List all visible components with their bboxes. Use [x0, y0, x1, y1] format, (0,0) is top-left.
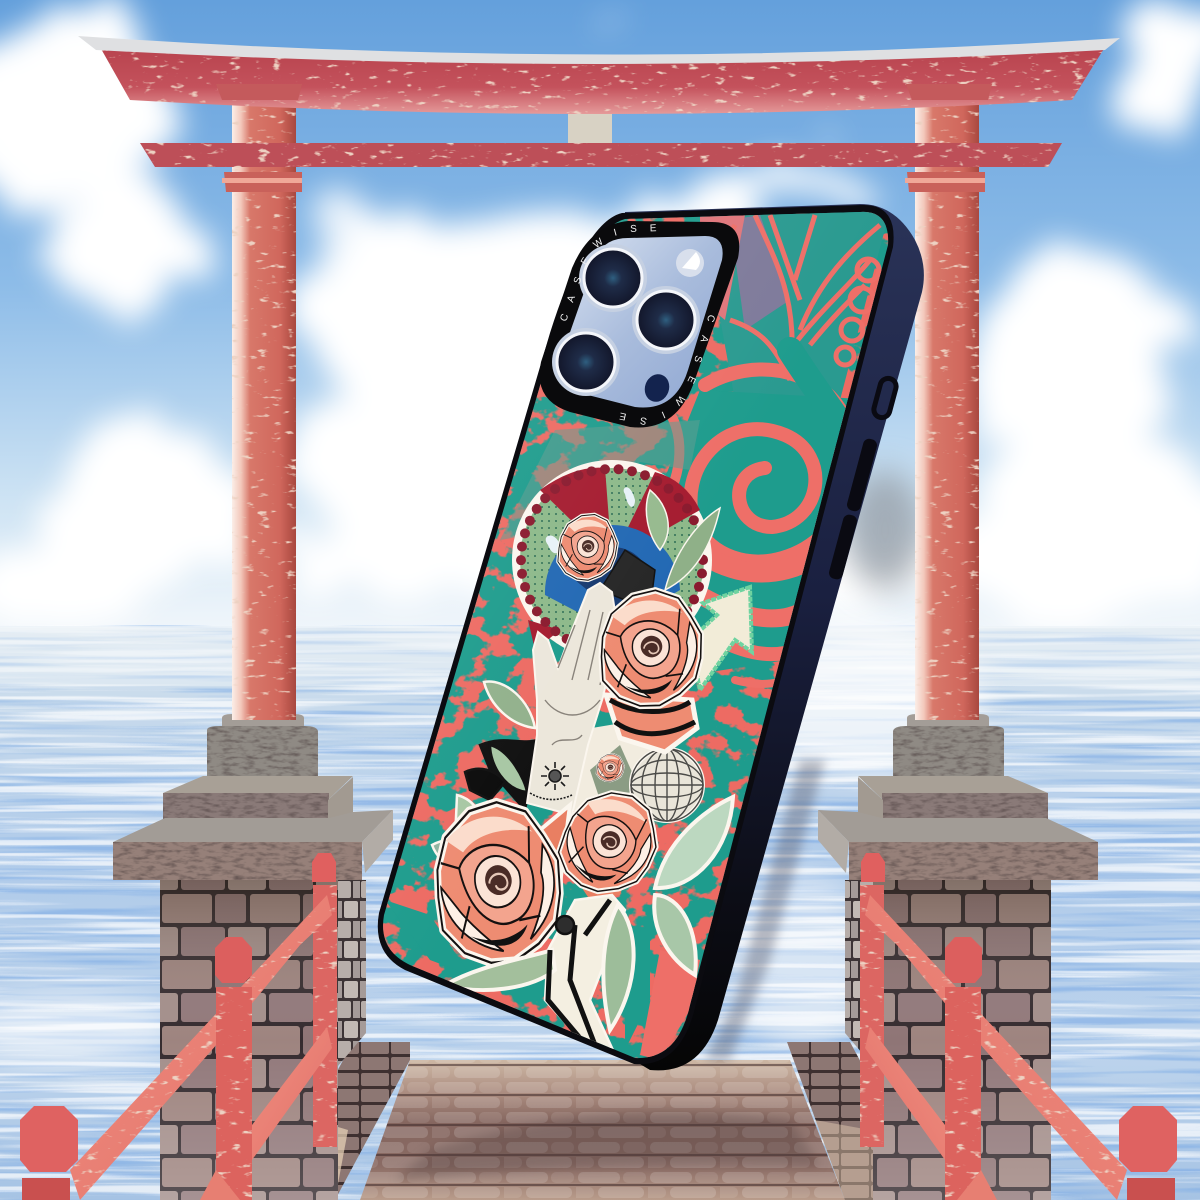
mini rose: [596, 754, 624, 782]
background top panel: [700, 210, 890, 400]
medallion: [512, 460, 712, 660]
case artwork: [383, 212, 888, 1058]
flash: [676, 249, 704, 277]
upper rose: [598, 587, 704, 754]
right torii pillar: [899, 84, 985, 720]
disco ball: [631, 749, 703, 821]
camera glass: [559, 236, 723, 408]
hand: [527, 583, 617, 815]
muted center band: [500, 420, 700, 540]
right curb: [787, 1042, 935, 1200]
right railing: [860, 853, 1177, 1200]
small top rose: [558, 515, 617, 580]
left railing: [20, 853, 337, 1200]
lens top: [579, 244, 647, 312]
bottom corner band: [640, 950, 700, 1060]
sky background: [0, 0, 1200, 630]
left stone base: [113, 714, 393, 1200]
right lower rose: [556, 790, 659, 897]
case side band: [625, 204, 924, 1070]
stem and lower leaves: [445, 797, 733, 1050]
right stone base: [818, 714, 1098, 1200]
torii top beam: [78, 36, 1120, 114]
clouds: [0, 2, 1200, 624]
lens right: [632, 286, 700, 354]
camera ring text right: CASEWISE: [619, 315, 715, 425]
gloss highlight: [464, 217, 700, 644]
phone case: [378, 204, 924, 1070]
leaves above medallion: [600, 490, 720, 610]
torii center post: [568, 100, 612, 144]
lidar sensor: [641, 371, 673, 405]
camera ring: [540, 221, 739, 427]
left torii pillar: [216, 84, 302, 720]
left leaves: [432, 682, 538, 866]
stone path: [267, 1042, 935, 1200]
lens bottom: [552, 328, 620, 396]
large lower rose: [434, 798, 572, 966]
stem panel and globe background: [574, 724, 652, 812]
grey cloud shadow beside phone: [845, 470, 925, 590]
green arrow: [690, 587, 752, 690]
side buttons: [828, 377, 898, 581]
camera ring text left: CASEWISE: [560, 224, 656, 321]
large background rose: [666, 337, 848, 688]
torii lower beam: [140, 143, 1062, 167]
case front rim: [378, 205, 894, 1064]
phone shadow blur: [705, 760, 825, 1060]
water: [0, 625, 1200, 1200]
left curb: [267, 1042, 410, 1200]
